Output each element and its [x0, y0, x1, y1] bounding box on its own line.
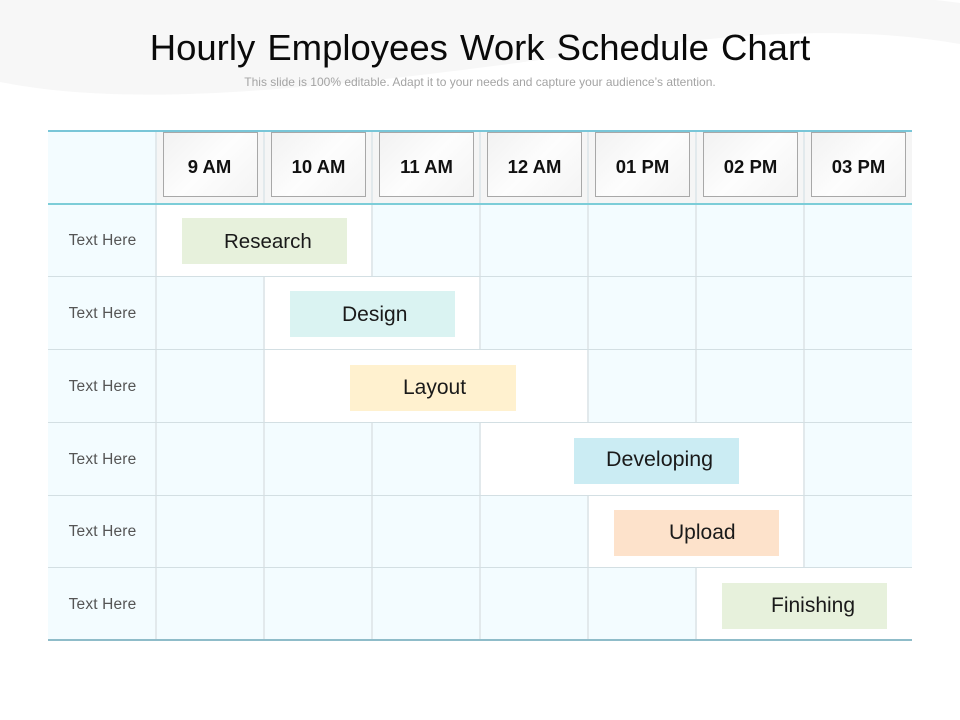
- background swoosh: [0, 0, 960, 110]
- row label 6: Text Here: [69, 596, 136, 613]
- time header: 11 AM: 11 AM: [400, 156, 453, 177]
- task bar: Design: Design: [342, 303, 407, 326]
- task bar: Developing: [574, 438, 739, 484]
- task bar: Research: Research: [224, 230, 312, 253]
- time header: 12 AM: 12 AM: [508, 156, 561, 177]
- time header: 03 PM: 03 PM: [832, 156, 885, 177]
- time header: 9 AM: [163, 132, 258, 197]
- subtitle: This slide is 100% editable. Adapt it to your needs and capture your audience’s attention.: [244, 75, 716, 89]
- title: Hourly Employees Work Schedule Chart: [150, 27, 810, 68]
- time header: 11 AM: [379, 132, 474, 197]
- time header: 01 PM: 01 PM: [616, 156, 669, 177]
- task bar: Upload: [614, 510, 779, 556]
- active slots: design: [265, 277, 479, 349]
- schedule table: [48, 130, 912, 641]
- time header: 02 PM: 02 PM: [724, 156, 777, 177]
- row label 1: Text Here: [69, 232, 136, 249]
- active slots: developing: [481, 423, 803, 495]
- time header: 02 PM: [703, 132, 798, 197]
- task bar: Layout: [350, 365, 516, 411]
- task bar: Design: [290, 291, 455, 337]
- row label 5: Text Here: [69, 523, 136, 540]
- task bar: Finishing: Finishing: [771, 594, 855, 617]
- task bar: Finishing: [722, 583, 887, 629]
- task bar: Upload: Upload: [669, 521, 736, 544]
- active slots: upload: [589, 496, 803, 567]
- row label 2: Text Here: [69, 305, 136, 322]
- time header: 12 AM: [487, 132, 582, 197]
- time header: 9 AM: 9 AM: [188, 156, 231, 177]
- time header: 10 AM: 10 AM: [292, 156, 345, 177]
- task bar: Layout: Layout: [403, 376, 466, 399]
- time header: 01 PM: [595, 132, 690, 197]
- active slots: finishing: [697, 568, 912, 640]
- active slots: layout: [265, 350, 587, 422]
- task bar: Research: [182, 218, 347, 264]
- header row band: [156, 131, 912, 203]
- task bar: Developing: Developing: [606, 447, 713, 471]
- active slots: research: [157, 204, 371, 276]
- row label 4: Text Here: [69, 451, 136, 468]
- row label 3: Text Here: [69, 378, 136, 395]
- time header: 03 PM: [811, 132, 906, 197]
- time header: 10 AM: [271, 132, 366, 197]
